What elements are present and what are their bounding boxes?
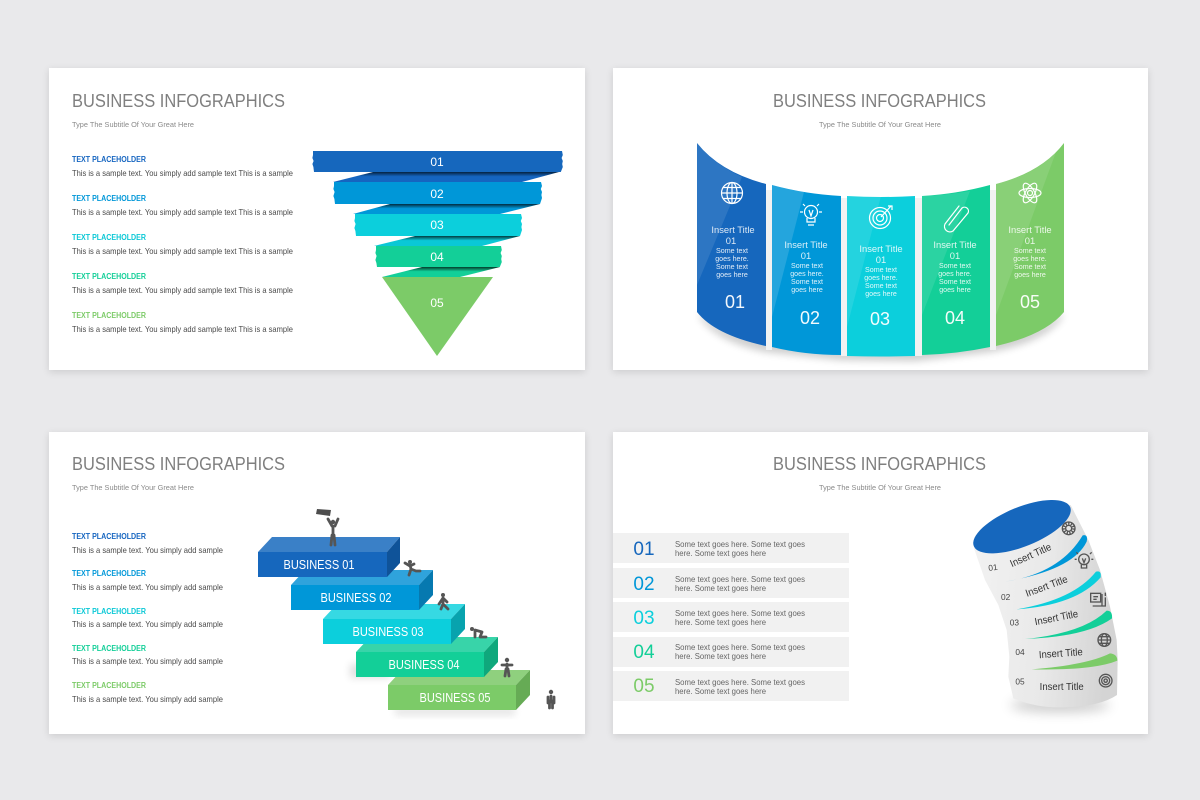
icon: standing person <box>548 690 554 708</box>
list: numbered rows: 05 <box>633 676 655 697</box>
card 05: Some text <box>1014 263 1046 271</box>
list: numbered rows: 03 <box>633 608 655 629</box>
chart: folded funnel: 04 <box>430 250 444 264</box>
list: numbered rows: 01 <box>633 539 655 560</box>
step 04 <box>356 637 498 677</box>
step 01: BUSINESS 01 <box>284 558 355 572</box>
panel: cylinder slide <box>613 432 1148 736</box>
card 03: Some text <box>865 282 897 290</box>
chart: folded funnel <box>312 151 563 356</box>
icon: running person <box>405 560 420 575</box>
card 02: Some text <box>791 278 823 286</box>
card 02: goes here <box>791 286 823 294</box>
list: numbered rows: Some text goes here. Some text goes <box>675 609 805 618</box>
card 04: Insert Title <box>933 239 977 250</box>
card 02: Insert Title <box>784 239 828 250</box>
funnel band 04 <box>375 246 502 267</box>
text block: stairs list: TEXT PLACEHOLDER <box>72 569 146 578</box>
chart: bent cylinder <box>966 489 1118 712</box>
list: numbered rows: here. Some text goes here <box>675 618 767 627</box>
icon: globe <box>1098 634 1111 646</box>
card 02 <box>772 185 841 355</box>
segment labels: Insert Title <box>1038 647 1083 661</box>
text block: stairs list <box>72 532 223 704</box>
list: numbered rows: 02 <box>633 574 655 595</box>
step 02: BUSINESS 02 <box>320 591 392 605</box>
step 02 <box>291 570 433 610</box>
step 04: BUSINESS 04 <box>388 658 460 672</box>
segment labels <box>988 542 1084 693</box>
card 04: Some text <box>939 262 971 270</box>
step 01 <box>258 537 400 577</box>
icon: paper clip <box>944 206 968 232</box>
card 04: 01 <box>950 250 960 261</box>
card 01: 01 <box>725 292 745 312</box>
segment labels: Insert Title <box>1024 574 1070 600</box>
crescent 03 <box>1017 571 1101 609</box>
card 01: Insert Title <box>711 224 755 235</box>
segment labels: 03 <box>1010 617 1019 627</box>
step 03: BUSINESS 03 <box>352 625 424 639</box>
crescent 04 <box>1025 611 1112 639</box>
card 05: Some text <box>1014 247 1046 255</box>
icon: crawling person <box>470 627 486 637</box>
card 02: 01 <box>801 250 811 261</box>
crescent 05 <box>1032 653 1117 669</box>
icon: gear <box>1062 522 1075 535</box>
funnel band 03 <box>354 214 522 236</box>
panel: stairs slide <box>49 432 585 736</box>
text block: funnel list: This is a sample text. You simply add sample text This is a sample <box>72 168 293 178</box>
cylinder top ellipse <box>966 489 1078 564</box>
step 05: BUSINESS 05 <box>420 691 491 705</box>
chart: folded funnel: 03 <box>430 218 444 232</box>
icon: target <box>870 206 892 228</box>
card 03: 03 <box>870 309 890 329</box>
list: numbered rows: here. Some text goes here <box>675 584 767 593</box>
funnel band 02 <box>333 182 542 204</box>
list: numbered rows: Some text goes here. Some text goes <box>675 678 805 687</box>
list: numbered rows: here. Some text goes here <box>675 549 767 558</box>
text block: funnel list: This is a sample text. You simply add sample text This is a sample <box>72 246 293 256</box>
card 04: goes here <box>939 286 971 294</box>
card 02: goes here. <box>790 270 824 278</box>
text block: stairs list: TEXT PLACEHOLDER <box>72 644 146 653</box>
funnel band 01 <box>312 151 563 172</box>
card 01: Some text <box>716 247 748 255</box>
segment labels: Insert Title <box>1034 609 1079 628</box>
list: numbered rows: Some text goes here. Some text goes <box>675 575 805 584</box>
text block: funnel list: This is a sample text. You simply add sample text This is a sample <box>72 285 293 295</box>
text block: stairs list: TEXT PLACEHOLDER <box>72 681 146 690</box>
icon: standing person with open arms <box>502 658 512 676</box>
funnel triangle 05 <box>382 277 493 356</box>
subtitle: stairs: Type The Subtitle Of Your Great Here <box>72 483 194 492</box>
card 05: goes here <box>1014 271 1046 279</box>
chart: curved cards <box>697 143 1064 361</box>
segment labels: 02 <box>1001 592 1011 602</box>
text block: stairs list: This is a sample text. You simply add sample <box>72 619 223 629</box>
text block: stairs list: This is a sample text. You simply add sample <box>72 545 223 555</box>
text block: funnel list: This is a sample text. You simply add sample text This is a sample <box>72 207 293 217</box>
icon: bulb <box>1075 552 1093 568</box>
card 04 <box>922 185 990 355</box>
list: numbered rows <box>613 533 849 701</box>
list: numbered rows: here. Some text goes here <box>675 652 767 661</box>
subtitle: funnel slide: Type The Subtitle Of Your Great Here <box>72 120 194 129</box>
segment labels: 01 <box>988 562 999 573</box>
step 03 <box>323 604 465 644</box>
card 02: Some text <box>791 262 823 270</box>
heading: funnel slide title: BUSINESS INFOGRAPHICS <box>72 91 285 111</box>
card 04: 04 <box>945 308 965 328</box>
text block: funnel list: TEXT PLACEHOLDER <box>72 155 146 164</box>
icon: light bulb <box>800 204 822 225</box>
card 04: goes here. <box>938 270 972 278</box>
card 01: Some text <box>716 263 748 271</box>
card 02: 02 <box>800 308 820 328</box>
card 01: goes here. <box>715 255 749 263</box>
card 05: goes here. <box>1013 255 1047 263</box>
card 01: 01 <box>726 235 736 246</box>
text block: stairs list: TEXT PLACEHOLDER <box>72 607 146 616</box>
text block: stairs list: This is a sample text. You simply add sample <box>72 694 223 704</box>
text block: funnel list: This is a sample text. You simply add sample text This is a sample <box>72 324 293 334</box>
segment labels: 04 <box>1015 647 1025 657</box>
icon: person with flag <box>316 509 338 545</box>
chart: folded funnel: 02 <box>430 187 444 201</box>
text block: funnel list: TEXT PLACEHOLDER <box>72 194 146 203</box>
heading: cylinder title: BUSINESS INFOGRAPHICS <box>773 454 986 474</box>
crescent 02 <box>1005 535 1087 582</box>
text block: stairs list: This is a sample text. You simply add sample <box>72 582 223 592</box>
card 03: goes here. <box>864 274 898 282</box>
subtitle: cylinder: Type The Subtitle Of Your Great Here <box>819 483 941 492</box>
segment labels: 05 <box>1015 676 1025 686</box>
card 05 <box>996 143 1064 346</box>
text block: stairs list: TEXT PLACEHOLDER <box>72 532 146 541</box>
card 01: goes here <box>716 271 748 279</box>
card 03: Some text <box>865 266 897 274</box>
subtitle: curved cards: Type The Subtitle Of Your Great Here <box>819 120 941 129</box>
icon: chart board <box>1091 593 1105 606</box>
text block: funnel list: TEXT PLACEHOLDER <box>72 272 146 281</box>
panel: curved cards slide <box>613 68 1148 372</box>
card 03: 01 <box>876 254 886 265</box>
text block: funnel list: TEXT PLACEHOLDER <box>72 311 146 320</box>
heading: curved cards title: BUSINESS INFOGRAPHICS <box>773 91 986 111</box>
icon: target <box>1099 674 1112 687</box>
step 05 <box>388 670 530 710</box>
card 05: 05 <box>1020 292 1040 312</box>
heading: stairs title: BUSINESS INFOGRAPHICS <box>72 454 285 474</box>
icon: globe <box>722 182 742 204</box>
segment labels: Insert Title <box>1040 682 1084 693</box>
list: numbered rows: 04 <box>633 642 655 663</box>
chart: 3D stairs <box>258 509 554 715</box>
list: numbered rows: here. Some text goes here <box>675 687 767 696</box>
segment labels: Insert Title <box>1009 542 1054 570</box>
card 03 <box>847 196 915 356</box>
card 05: 01 <box>1025 235 1035 246</box>
card 04: Some text <box>939 278 971 286</box>
chart: folded funnel: 01 <box>430 155 444 169</box>
icon: atom <box>1019 181 1041 205</box>
chart: folded funnel: 05 <box>430 296 444 310</box>
panel: funnel slide <box>49 68 585 372</box>
text block: funnel list: TEXT PLACEHOLDER <box>72 233 146 242</box>
icon: climbing person <box>439 593 448 609</box>
card 01 <box>697 143 766 346</box>
list: numbered rows: Some text goes here. Some text goes <box>675 540 805 549</box>
list: numbered rows: Some text goes here. Some text goes <box>675 643 805 652</box>
text block: funnel list <box>72 155 293 334</box>
card 03: Insert Title <box>859 243 903 254</box>
text block: stairs list: This is a sample text. You simply add sample <box>72 656 223 666</box>
card 05: Insert Title <box>1008 224 1052 235</box>
card 03: goes here <box>865 290 897 298</box>
